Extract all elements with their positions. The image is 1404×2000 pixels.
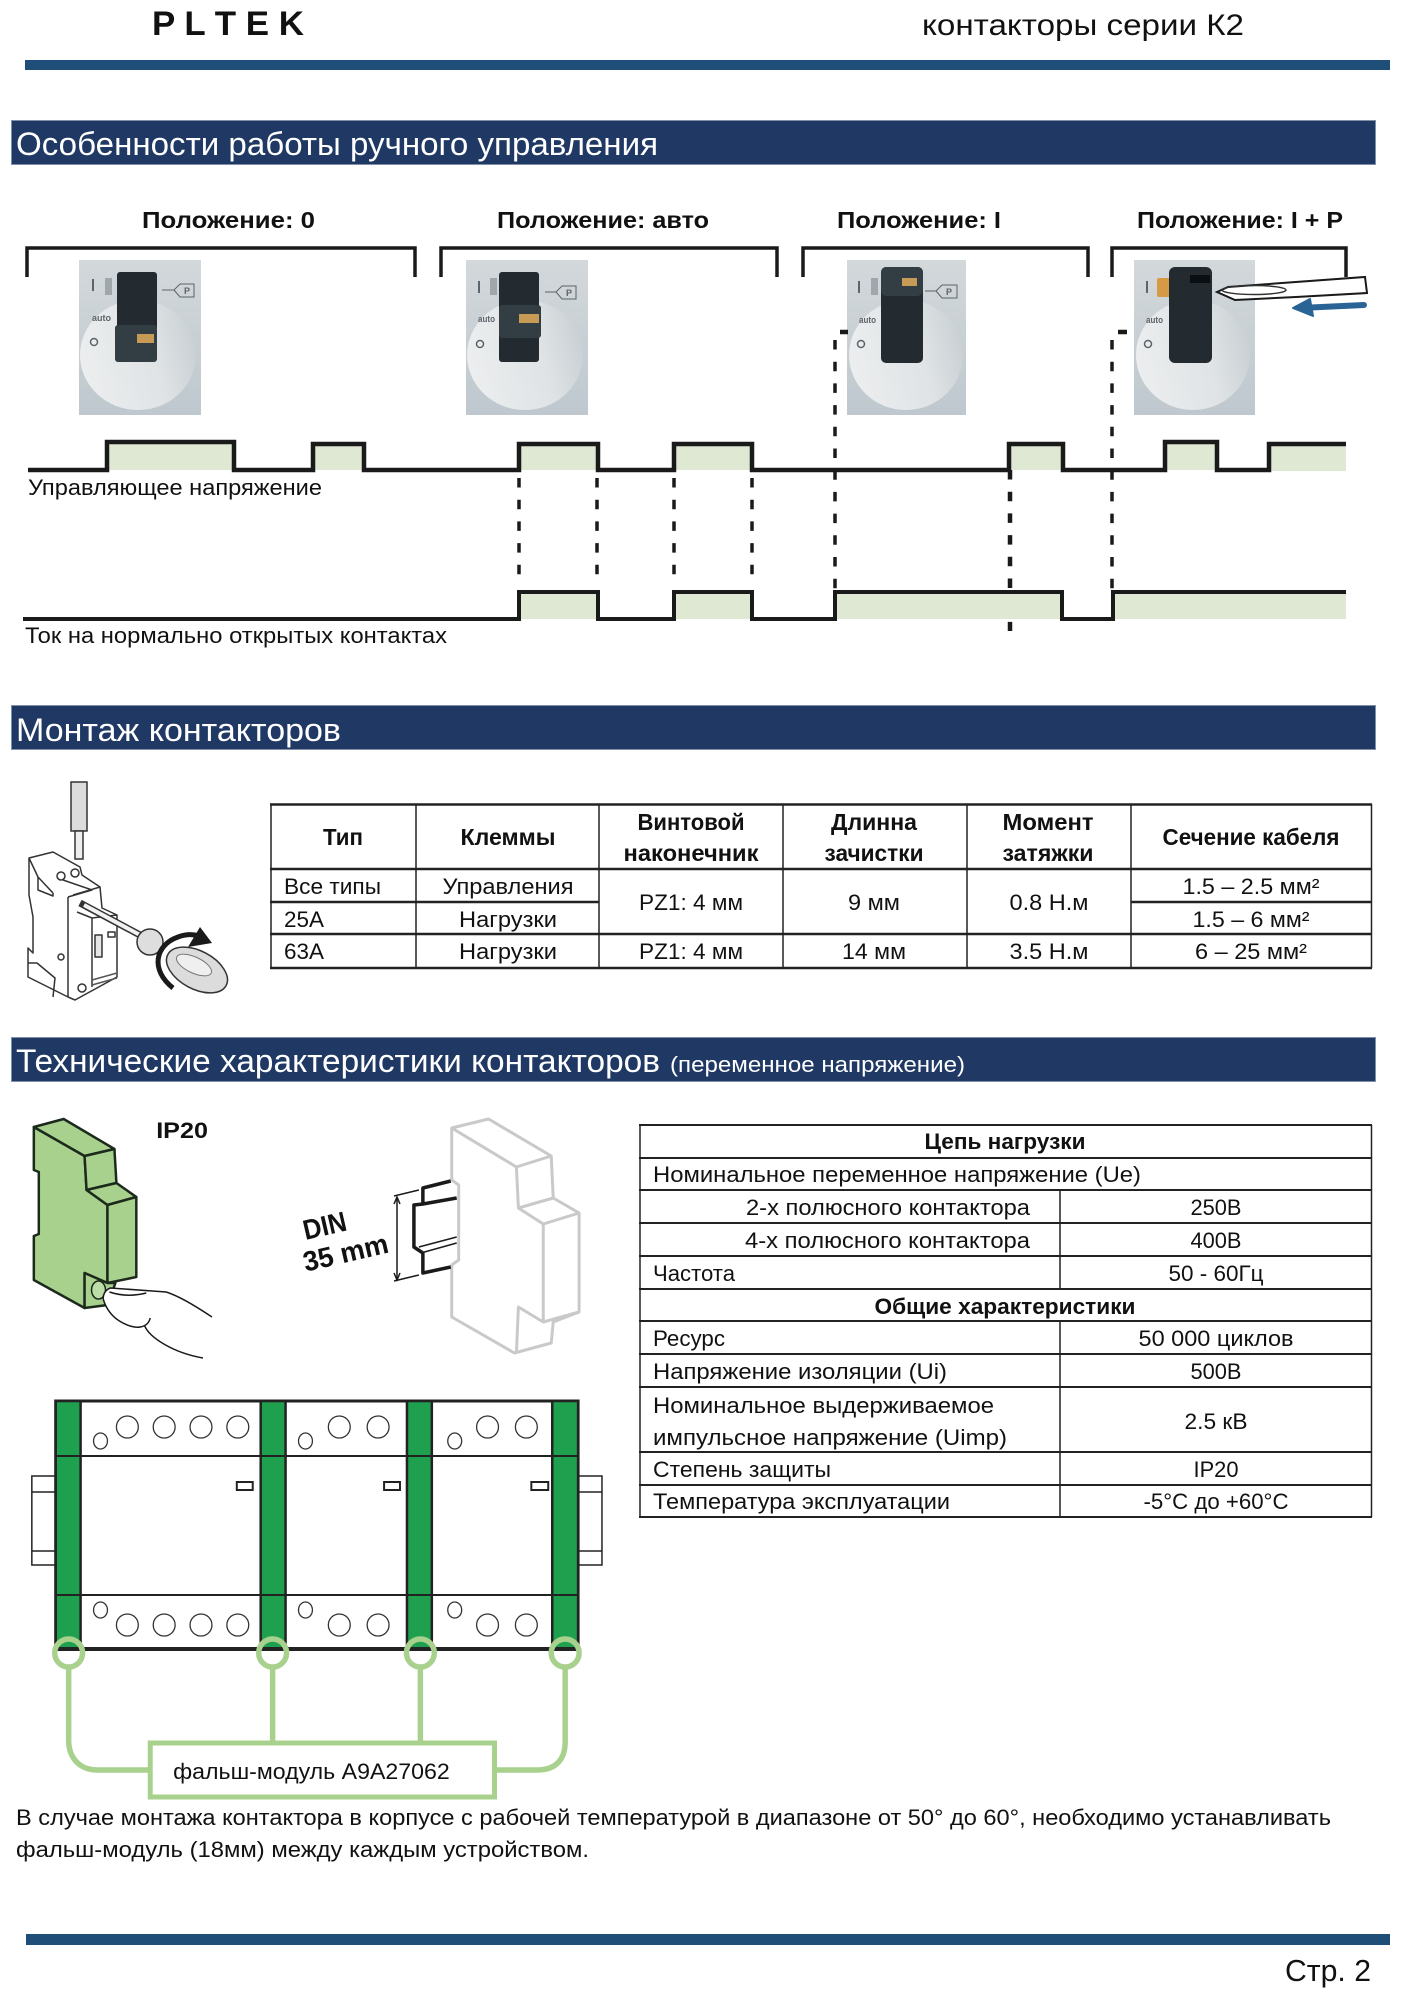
arrow: rotation: [158, 927, 212, 988]
section heading: manual control: [12, 120, 1376, 164]
section heading: technical characteristics: [12, 1038, 1376, 1082]
table text: IP20: [1194, 1457, 1238, 1482]
table text: Номинальное выдерживаемое: [653, 1393, 994, 1418]
table body rows: Управления: [442, 874, 574, 899]
photo: position I: P: [946, 287, 952, 297]
position titles: Положение: I: [837, 207, 1001, 233]
section heading: manual control: Особенности работы ручного управления: [16, 126, 658, 162]
table body rows: Все типы: [284, 874, 381, 899]
table text: Цепь нагрузки: [924, 1129, 1086, 1154]
contactor frame: [56, 1401, 578, 1649]
module outline: [452, 1119, 579, 1353]
table: load circuit and general characteristics: [639, 1125, 1372, 1517]
photo: position 0: auto: [92, 313, 112, 323]
table text: импульсное напряжение (Uimp): [653, 1425, 1007, 1450]
table header row: Винтовой: [638, 809, 744, 835]
table body rows: PZ1: 4 мм: [639, 939, 743, 964]
diagram: contactors with spacer modules: [32, 1401, 602, 1797]
header rule: [25, 60, 1390, 70]
table body rows: 0.8 Н.м: [1010, 890, 1088, 915]
table body rows: 1.5 – 2.5 мм²: [1182, 874, 1320, 899]
table body rows: 6 – 25 мм²: [1195, 939, 1307, 964]
table text: 250В: [1190, 1195, 1242, 1220]
table: mounting parameters: [270, 804, 1372, 968]
note text: В случае монтажа контактора в корпусе с рабочей температурой в диапазоне от 50° до 60°, необходимо устанавливать: [16, 1805, 1331, 1830]
arrow: push direction: [1293, 299, 1364, 316]
note text: [16, 1805, 1331, 1862]
contactor body: [28, 852, 117, 1000]
green spacer strips: [56, 1401, 578, 1649]
terminal holes: [94, 1416, 537, 1636]
section heading: mounting: [12, 706, 1376, 750]
callout connectors: [55, 1639, 579, 1770]
screwdriver: [80, 903, 235, 1002]
table body rows: 1.5 – 6 мм²: [1192, 907, 1310, 932]
table grid: [639, 1125, 1372, 1517]
photo: position 0: [79, 260, 201, 415]
table text: Номинальное переменное напряжение (Ue): [653, 1162, 1141, 1187]
IP20 label: IP20: [156, 1118, 208, 1143]
photo: position I + P with screwdriver: auto: [1146, 315, 1163, 325]
table text: 50 000 циклов: [1138, 1326, 1294, 1351]
table text: Напряжение изоляции (Ui): [653, 1359, 947, 1384]
table text: 500В: [1190, 1359, 1242, 1384]
dimension arrow: [394, 1190, 419, 1281]
illustration: IP20 module with finger: [34, 1118, 212, 1358]
table header row: [323, 809, 1340, 866]
section heading: technical characteristics: (переменное напряжение): [670, 1052, 965, 1077]
table header row: Момент: [1002, 809, 1094, 835]
spacer module callout box: фальш-модуль А9А27062: [173, 1759, 450, 1784]
table header row: Клеммы: [460, 824, 556, 850]
table text: 2.5 кВ: [1184, 1409, 1248, 1434]
table header row: затяжки: [1002, 840, 1094, 866]
table text: 50 - 60Гц: [1168, 1261, 1264, 1286]
series title: контакторы серии К2: [922, 9, 1244, 42]
table body rows: 14 мм: [842, 939, 906, 964]
table body rows: Нагрузки: [459, 939, 557, 964]
DIN 35 mm label: [293, 1198, 391, 1278]
table text: Общие характеристики: [874, 1294, 1136, 1319]
photo: position auto: auto: [478, 314, 495, 324]
photo: position auto: [466, 260, 588, 415]
table body rows: 63А: [284, 939, 324, 964]
table text: 2-х полюсного контактора: [746, 1195, 1031, 1220]
photo: position 0: P: [184, 286, 190, 296]
table text: 400В: [1190, 1228, 1242, 1253]
table text: 4-х полюсного контактора: [745, 1228, 1031, 1253]
table header row: Длинна: [831, 809, 917, 835]
table text: Степень защиты: [653, 1457, 831, 1482]
chart: control voltage waveform: [28, 442, 1346, 500]
table header row: наконечник: [624, 840, 759, 866]
table body rows: 3.5 Н.м: [1010, 939, 1088, 964]
DIN tabs: [32, 1476, 602, 1565]
DIN 35 mm label: 35 mm: [300, 1228, 391, 1278]
table grid: [270, 804, 1372, 968]
note text: фальш-модуль (18мм) между каждым устройством.: [16, 1837, 589, 1862]
page header: [25, 5, 1390, 70]
section heading: mounting: Монтаж контакторов: [16, 712, 341, 748]
divider lines: [56, 1456, 578, 1595]
table body rows: [284, 874, 1320, 964]
DIN 35 mm label: DIN: [300, 1206, 349, 1246]
photo: position auto: P: [566, 288, 572, 298]
photo: position I: auto: [859, 315, 876, 325]
page footer: [26, 1934, 1390, 1988]
table text: Температура эксплуатации: [653, 1489, 950, 1514]
wire: [71, 782, 87, 859]
finger: [103, 1288, 212, 1327]
table body rows: Нагрузки: [459, 907, 557, 932]
table body rows: 25А: [284, 907, 324, 932]
photo: position I + P with screwdriver: [1134, 260, 1367, 415]
table body rows: PZ1: 4 мм: [639, 890, 743, 915]
footer rule: [26, 1934, 1390, 1945]
chart: control voltage waveform: Управляющее напряжение: [28, 475, 322, 500]
section heading: technical characteristics: Технические характеристики контакторов: [16, 1043, 660, 1079]
illustration: mounting with screwdriver: [28, 782, 235, 1002]
table body rows: 9 мм: [848, 890, 900, 915]
brand logo text: P L T E K: [152, 5, 304, 43]
table text: Частота: [653, 1261, 736, 1286]
chart: NO contact current waveform: Ток на нормально открытых контактах: [25, 623, 447, 648]
photo: position I: [847, 260, 966, 415]
table header row: Сечение кабеля: [1162, 824, 1340, 850]
table text: [653, 1129, 1294, 1514]
position titles: Положение: 0: [142, 207, 315, 233]
icon: screwdriver: [1217, 277, 1367, 300]
table header row: зачистки: [824, 840, 924, 866]
panel: manual control positions: [23, 207, 1367, 648]
table text: -5°С до +60°С: [1144, 1489, 1289, 1514]
table header row: Тип: [323, 824, 363, 850]
dashed guide lines: [519, 332, 1127, 631]
position titles: Положение: I + P: [1137, 207, 1343, 233]
position titles: [142, 207, 1343, 233]
position brackets: [27, 248, 1346, 277]
illustration: DIN rail mounting: [293, 1119, 579, 1353]
DIN rail: [414, 1181, 457, 1273]
position titles: Положение: авто: [497, 207, 709, 233]
indicator windows: [237, 1482, 548, 1490]
page number: Стр. 2: [1285, 1953, 1371, 1988]
table text: Ресурс: [653, 1326, 725, 1351]
chart: NO contact current waveform: [23, 592, 1346, 648]
spacer module callout box: [150, 1743, 495, 1797]
